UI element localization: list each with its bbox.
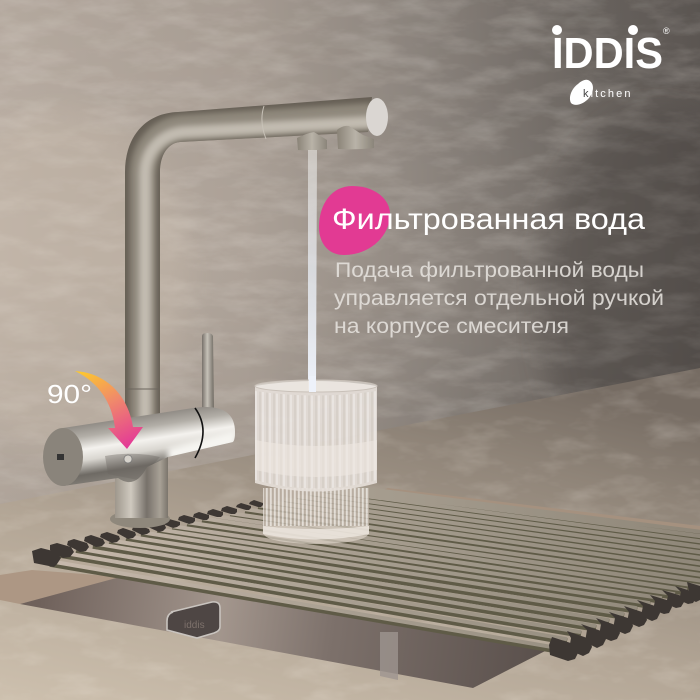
background: travertine wall [0, 0, 700, 520]
logo: IDDIS kitchen [552, 25, 670, 105]
glass [255, 376, 377, 544]
lever button [124, 455, 132, 463]
small pot with olive at right edge [668, 367, 700, 442]
lower glass [263, 488, 369, 544]
rack end caps [32, 500, 700, 661]
upper glass [255, 381, 377, 492]
description text: Подача фильтрованной воды [335, 259, 644, 282]
logo: IDDIS kitchen: IDDIS [552, 29, 663, 78]
faucet mixer body [43, 407, 235, 486]
sink rough stone edge [0, 570, 122, 604]
description text [334, 259, 664, 338]
rotation angle label: 90° [47, 379, 92, 409]
stone rim behind the rack [376, 488, 700, 540]
countertop [0, 360, 700, 700]
faucet column and spout [120, 90, 388, 430]
aerator nozzles [297, 132, 327, 150]
sink roll-up rack [32, 486, 700, 661]
description text: на корпусе смесителя [334, 315, 569, 338]
heading: Фильтрованная вода [332, 203, 645, 236]
overflow plate [167, 602, 220, 638]
logo: IDDIS kitchen: ® [663, 26, 670, 36]
logo: IDDIS kitchen: kitchen [583, 88, 633, 100]
overflow plate: iddis [184, 620, 205, 631]
sink bowl [20, 577, 551, 688]
mixer end cap [43, 428, 83, 486]
faucet base [110, 455, 170, 528]
spout end face [366, 98, 388, 136]
sink seam [380, 632, 398, 680]
water stream [308, 150, 317, 390]
icon: rotation arrow [75, 371, 143, 449]
faucet lever handle [202, 333, 214, 412]
description text: управляется отдельной ручкой [334, 287, 664, 310]
pink accent blob [319, 186, 390, 255]
